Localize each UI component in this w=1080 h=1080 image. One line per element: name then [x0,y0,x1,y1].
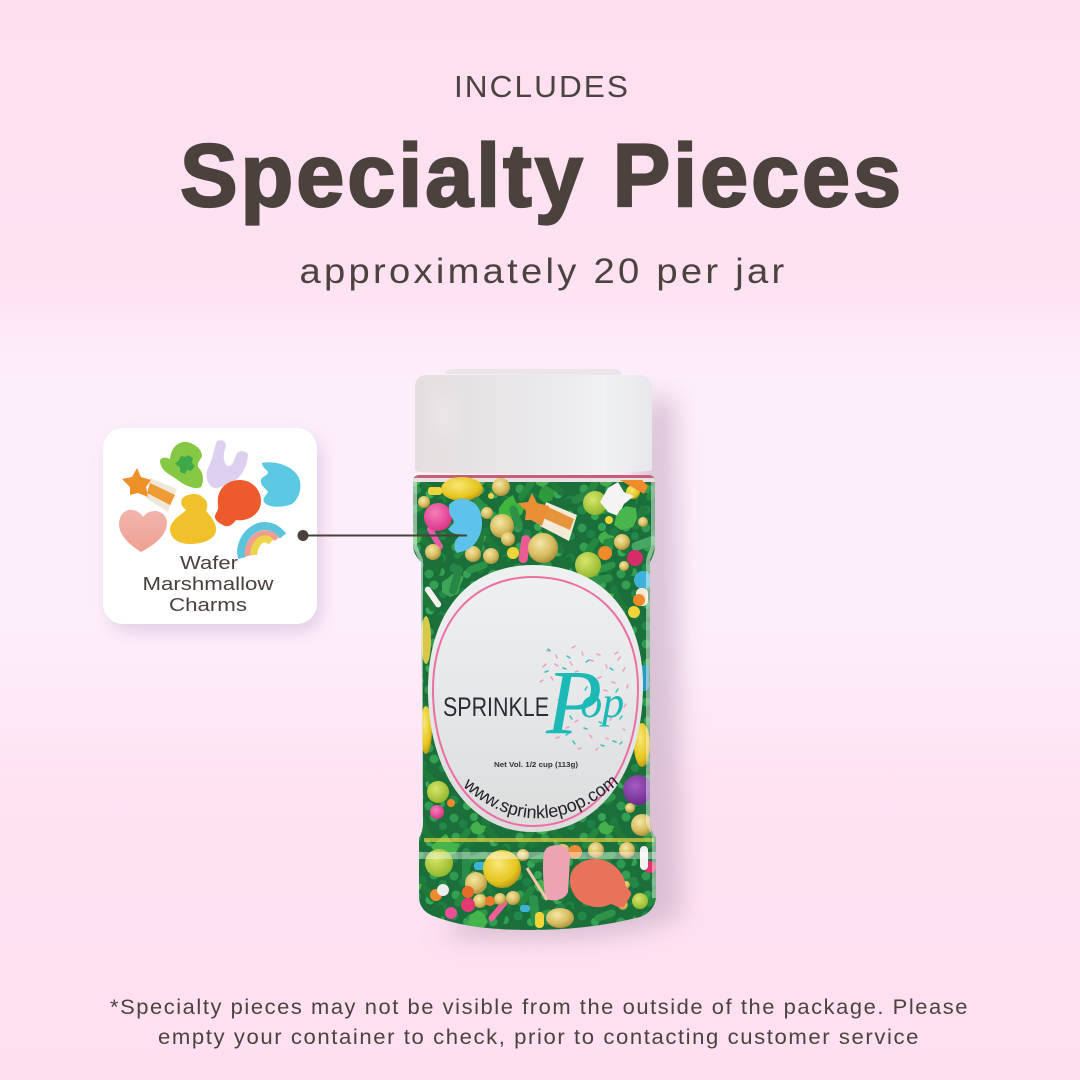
charm: heart [119,510,167,552]
product jar [413,369,656,930]
charm: rainbow [241,526,283,558]
jar body with sprinkles [413,473,659,930]
charm: red balloon [215,480,261,526]
pop logo text: op [580,678,624,727]
confetti [540,646,628,750]
charm: blue moon [261,462,300,507]
footnote: empty your container to check, prior to contacting customer service [158,1026,920,1049]
lower sprinkles [419,834,659,930]
callout card: Charms [169,595,247,615]
card caption: Wafer [180,553,238,573]
upper sprinkles [418,477,658,618]
title: Specialty Pieces [180,125,904,225]
sprinkle logo text: SPRINKLE [443,692,549,722]
footnote: *Specialty pieces may not be visible from the outside of the package. Please [110,996,969,1019]
charm: yellow bell [170,494,216,544]
comet charm [518,493,577,541]
net volume text: Net Vol. 1/2 cup (113g) [494,760,579,769]
jar cap [415,369,652,474]
charm: lavender horseshoe [207,440,248,488]
blue charm [448,499,482,553]
pointer line to jar [298,530,467,541]
subtitle: approximately 20 per jar [300,252,788,291]
footnote [110,996,969,1049]
website text: www.sprinklepop.com [464,777,618,820]
jar label [428,565,643,832]
charm: shooting star [122,468,177,512]
pink wafer [543,845,570,900]
callout card: Marshmallow [142,574,275,594]
pop logo text: P [545,651,602,753]
side sprinkles behind label [420,616,653,836]
red charm [570,859,631,908]
charm: green hat [160,442,203,488]
eyebrow: includes: INCLUDES [454,69,630,104]
jar shadow [440,395,682,940]
callout card [103,428,322,632]
glass edge highlights [415,482,421,898]
